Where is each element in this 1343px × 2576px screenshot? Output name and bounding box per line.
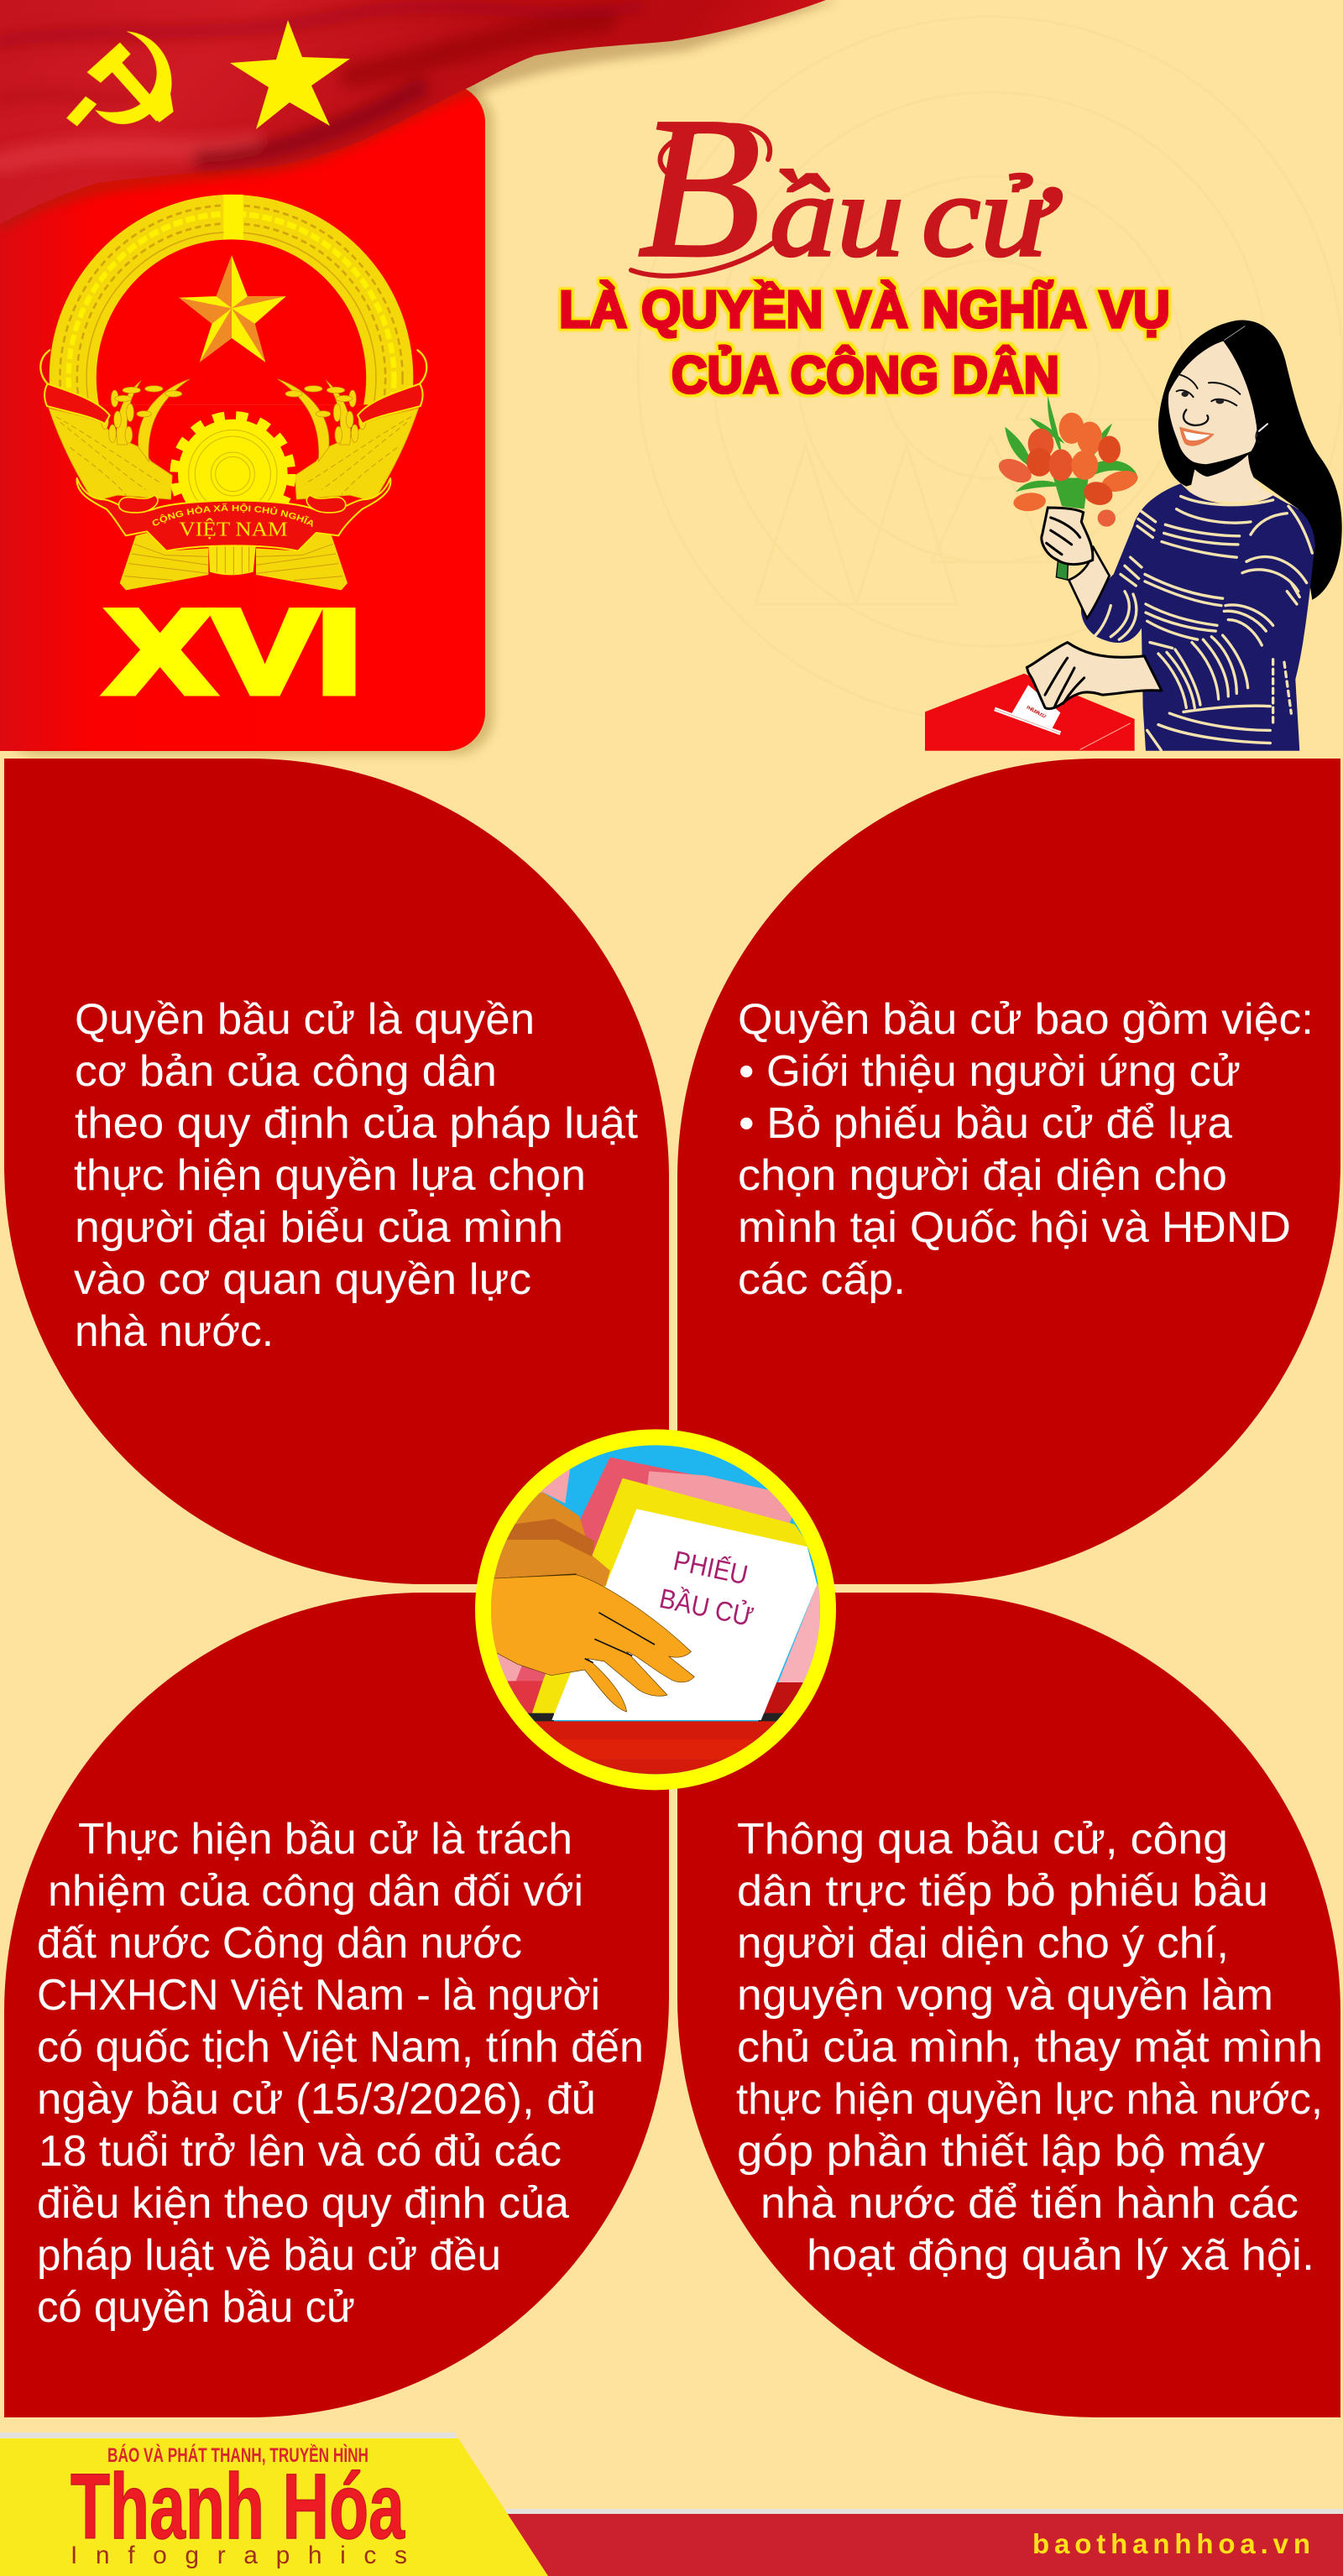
XVI mark: XVI [107, 586, 361, 717]
emblem banner: VIỆT NAM [179, 517, 288, 540]
subtitle line 1: LÀ QUYỀN VÀ NGHĨA VỤ [559, 281, 1170, 339]
panel shape [677, 1593, 1340, 2417]
icon: flag star [230, 20, 350, 129]
raised hand [1042, 508, 1093, 565]
emblem banner: CỘNG HÒA XÃ HỘI CHỦ NGHĨA [153, 503, 313, 527]
rice stalks left [102, 379, 190, 461]
panel text: đất nước Công dân nước [37, 1919, 522, 1968]
voting arm and hand [1027, 643, 1162, 709]
neck [1189, 452, 1273, 502]
hand [481, 1575, 694, 1712]
footer strip [504, 2509, 1343, 2514]
national emblem [39, 195, 428, 591]
panel text: có quốc tịch Việt Nam, tính đến [37, 2023, 644, 2072]
box slot and rim [507, 1681, 803, 1722]
panel text [74, 995, 639, 1356]
title swash [631, 125, 772, 276]
panel text: chủ của mình, thay mặt mình [737, 2023, 1323, 2072]
facial features [1177, 374, 1267, 442]
ballot label: PHIẾU [671, 1545, 750, 1590]
ballot label: BẦU CỬ [657, 1583, 756, 1632]
panel text: mình tại Quốc hội và HĐND [738, 1203, 1291, 1252]
jaw shadow [1184, 451, 1252, 477]
sleeve [481, 1492, 610, 1586]
mouth [1179, 427, 1215, 446]
pink right strip [778, 1584, 820, 1683]
ribbon curls [40, 350, 426, 383]
panel text [736, 1815, 1323, 2280]
lower ballot box [534, 1721, 776, 1774]
panel text: góp phần thiết lập bộ máy [737, 2127, 1265, 2176]
finger lines [585, 1613, 655, 1663]
panel text: Quyền bầu cử là quyền [75, 995, 535, 1044]
panel: scope of voting rights [677, 759, 1340, 1584]
emblem lower part [39, 349, 428, 591]
bouquet leaves [1005, 395, 1138, 509]
panel text: người đại diện cho ý chí, [737, 1919, 1229, 1968]
logo yellow panel [0, 2438, 548, 2576]
gear [175, 416, 291, 532]
central circle: ballot icon [475, 1429, 836, 1794]
panel text: Thông qua bầu cử, công [737, 1815, 1228, 1864]
hair parting [1224, 326, 1245, 341]
emblem banner [76, 477, 391, 552]
box highlight [556, 1740, 755, 1759]
flag folds [0, 7, 638, 164]
finger lines [1047, 518, 1080, 555]
hair [1158, 321, 1342, 600]
panel text: pháp luật về bầu cử đều [37, 2231, 501, 2280]
panel text: 18 tuổi trở lên và có đủ các [39, 2127, 562, 2176]
tulips [995, 413, 1140, 527]
ballot box [925, 674, 1135, 751]
panel text: người đại biểu của mình [75, 1203, 563, 1252]
title script: Bầu cử: B [638, 76, 761, 299]
red panel [0, 84, 485, 751]
circle picture [491, 1445, 820, 1774]
lower wreath left [49, 409, 172, 501]
sweater [1081, 483, 1315, 751]
panel text: các cấp. [738, 1255, 906, 1304]
subtitle line 2: CỦA CÔNG DÂN [672, 347, 1059, 404]
panel text: hoạt động quản lý xã hội. [807, 2231, 1314, 2280]
emblem star [179, 255, 286, 362]
panel text: thực hiện quyền lực nhà nước, [736, 2075, 1323, 2124]
logo strip [0, 2433, 456, 2438]
logo block [0, 2433, 548, 2576]
panel text: CHXHCN Việt Nam - là người [37, 1971, 600, 2020]
yellow ring [475, 1429, 836, 1790]
panel: duty of citizens [4, 1593, 669, 2417]
panel shape [677, 759, 1340, 1584]
title script: Bầu cử: ầu [770, 151, 904, 281]
red panel shadow [0, 84, 494, 755]
panel text: nguyện vọng và quyền làm [737, 1971, 1273, 2020]
panel text: điều kiện theo quy định của [37, 2179, 569, 2228]
ribbon left [44, 383, 110, 424]
ribbon right [358, 383, 423, 424]
flag shadow [0, 0, 839, 231]
flag cloth [0, 0, 826, 224]
panel text: có quyền bầu cử [37, 2283, 355, 2332]
footer bar [504, 2509, 1343, 2576]
party flag [0, 0, 839, 231]
panel text: dân trực tiếp bỏ phiếu bầu [737, 1867, 1268, 1916]
panel shape [4, 1593, 669, 2417]
background drum pattern [638, 17, 1343, 722]
website address: baothanhhoa.vn [1032, 2528, 1310, 2559]
panel text: theo quy định của pháp luật [75, 1099, 639, 1148]
infographics label: Infographics [71, 2542, 407, 2569]
panel: right to vote [4, 759, 669, 1584]
panel text: nhà nước để tiến hành các [760, 2179, 1299, 2228]
panel text: Thực hiện bầu cử là trách [78, 1815, 572, 1864]
panel: meaning of voting [677, 1593, 1340, 2417]
panel text: ngày bầu cử (15/3/2026), đủ [37, 2075, 596, 2124]
yellow sheet [530, 1478, 808, 1720]
ballot paper: PHIẾU BẦU CỬ [1026, 705, 1048, 720]
ballot label [660, 1551, 754, 1624]
wreath upper arc [49, 195, 413, 404]
panel text [37, 1815, 644, 2332]
panel shape [4, 759, 669, 1584]
header left panel [0, 86, 498, 759]
panel text: • Bỏ phiếu bầu cử để lựa [739, 1099, 1232, 1148]
panel text [738, 995, 1314, 1304]
panel text: • Giới thiệu người ứng cử [739, 1047, 1241, 1096]
panel text: vào cơ quan quyền lực [74, 1255, 531, 1304]
publisher line: BÁO VÀ PHÁT THANH, TRUYỀN HÌNH [107, 2443, 368, 2467]
illustration: woman voting [925, 321, 1342, 751]
forearm with bouquet [1069, 546, 1110, 618]
sweater stripes [1095, 496, 1312, 750]
title script: Bầu cử: cử [922, 151, 1062, 281]
lower wreath right [295, 409, 418, 501]
panel text: cơ bản của công dân [75, 1047, 497, 1096]
sheaf centre [208, 544, 256, 575]
rice stalks right [278, 379, 366, 461]
stem [1056, 557, 1069, 580]
sheaf left [120, 533, 208, 590]
panel text: nhiệm của công dân đối với [48, 1867, 583, 1916]
panel text: Quyền bầu cử bao gồm việc: [738, 995, 1314, 1044]
white ballot [551, 1509, 817, 1720]
pink left backing [491, 1469, 570, 1683]
publisher name: Thanh Hóa [71, 2455, 405, 2558]
voting fingers [1045, 658, 1084, 707]
title [559, 76, 1170, 404]
footer red band [504, 2514, 1343, 2576]
ballot paper [1011, 685, 1060, 730]
panel text: chọn người đại diện cho [738, 1151, 1227, 1200]
panel text: nhà nước. [75, 1307, 274, 1356]
face [1168, 342, 1257, 466]
red-pink sheet [515, 1457, 789, 1684]
sheaf right [256, 533, 348, 590]
wreath grain texture [56, 417, 411, 495]
icon: hammer and sickle [66, 31, 174, 126]
panel text: thực hiện quyền lựa chọn [74, 1151, 586, 1200]
sheaf lines [124, 544, 342, 581]
